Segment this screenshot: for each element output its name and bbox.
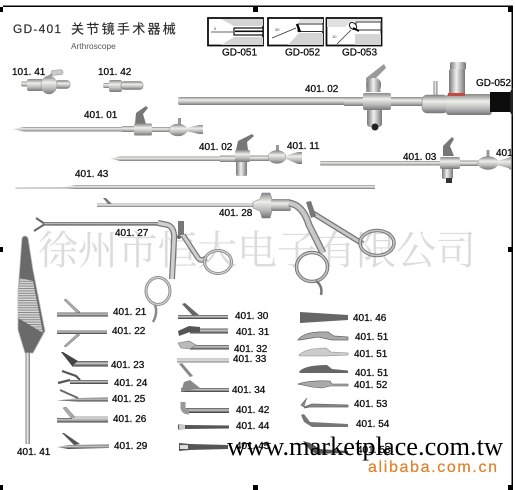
panel: GD-052 diagram: 30 [275,27,280,32]
title: 关节镜手术器械 [71,22,178,36]
label: 401.34: 401. 34 [232,385,266,396]
tip 401.32 [178,341,229,350]
tip 401.51 a [298,332,348,340]
panel: GD-053 diagram: 10 [332,34,337,39]
label: 401.46: 401. 46 [353,313,387,324]
tip 401.22 [57,330,107,347]
tip 401.21 [57,299,108,316]
tip 401.23 [61,352,108,366]
label: 401.22: 401. 22 [112,326,146,337]
label: 401.25: 401. 25 [112,394,146,405]
label: 401.51 a: 401. 51 [355,332,389,343]
label: 401.31: 401. 31 [236,327,270,338]
watermark: alibaba url: alibaba.com.cn [368,459,497,476]
title [13,22,178,36]
label: 401.24: 401. 24 [114,378,148,389]
instrument: 401.28 forceps [97,193,394,295]
tip 401.26 [57,407,108,422]
label: 401 clipped: 401 [496,148,513,159]
watermark: company name: 徐州市恒大电子有限公司 [38,228,476,273]
tip 401.46 [300,312,348,323]
instrument: 101.42 connector [103,80,143,92]
tip 401.34 [181,380,229,392]
label: GD-053: GD-053 [342,48,377,58]
label: 401.51 b: 401. 51 [354,349,388,360]
label: 401.26: 401. 26 [113,414,147,425]
tip 401.25 [57,390,108,402]
tip 401.51 c [299,365,348,373]
tip 401.30 [178,303,228,319]
label: 401.41 knife: 401. 41 [17,447,51,458]
watermark: marketplace url: www.marketplace.com.tw [227,431,503,461]
label: 401.43: 401. 43 [75,169,109,180]
forceps tips column 1 [57,299,148,452]
tip 401.33 [177,358,229,377]
label: 401.29: 401. 29 [114,441,148,452]
tip 401.29 [57,433,109,449]
tip 401.31 [178,326,228,336]
label: 401.02 lower: 401. 02 [199,142,233,153]
label: 101.41: 101. 41 [12,67,46,78]
label: 101.42: 101. 42 [98,67,132,78]
label: 401.23: 401. 23 [111,360,145,371]
panel: GD-053 diagram [326,18,382,46]
label: 401.21: 401. 21 [113,307,147,318]
label: 401.27: 401. 27 [115,228,149,239]
label: 401.42: 401. 42 [236,405,270,416]
tip 401.58 [303,441,348,454]
tip 401.51 b [299,348,348,356]
tip 401.24 [58,371,108,384]
label: 401.28: 401. 28 [219,208,253,219]
instrument: 401.01 trocar [12,106,203,136]
panel: GD-052 diagram [268,18,323,46]
label: 401.58: 401. 58 [357,445,391,456]
label: 401.30: 401. 30 [235,311,269,322]
panel: GD-051 diagram [208,18,263,46]
label: GD-052 scope: GD-052 [476,78,511,89]
instrument: 401.03 trocar [320,137,511,183]
label: GD-051: GD-051 [222,48,257,58]
tip 401.52 [298,381,348,388]
label: 401.03: 401. 03 [403,152,437,163]
label: GD-052: GD-052 [285,48,320,58]
label: 401.52: 401. 52 [354,380,388,391]
label: 401.32: 401. 32 [234,344,268,355]
instrument: 401.43 probe [14,185,375,189]
tip 401.53 [301,398,348,408]
label: 401.45: 401. 45 [236,441,270,452]
instrument: 401.41 knife [18,236,45,444]
tip 401.45 [179,443,228,451]
label: 401.02: 401. 02 [305,84,339,95]
instrument: 401.02 arthroscope [178,62,513,130]
shaver tips column 3 [298,312,391,456]
label: 401.51 c: 401. 51 [355,368,389,379]
label: 401.11: 401. 11 [287,141,320,152]
label: 401.01: 401. 01 [84,110,118,121]
subtitle: Arthroscope [71,41,116,51]
label: 401.53: 401. 53 [354,399,388,410]
label: 401.54: 401. 54 [356,419,390,430]
forceps tips column 2 [177,303,270,452]
instrument: 401.02 trocar [110,134,302,176]
title: GD-401 [13,22,62,36]
tip 401.42 [183,402,229,413]
tip 401.54 [301,414,348,427]
panel: GD-051 diagram: 0 [214,26,217,31]
tip 401.44 [178,424,229,430]
instrument: 101.41 valve [21,69,70,94]
label: 401.44: 401. 44 [236,421,270,432]
label: 401.33: 401. 33 [233,354,267,365]
instrument: 401.27 rongeur [34,218,232,322]
